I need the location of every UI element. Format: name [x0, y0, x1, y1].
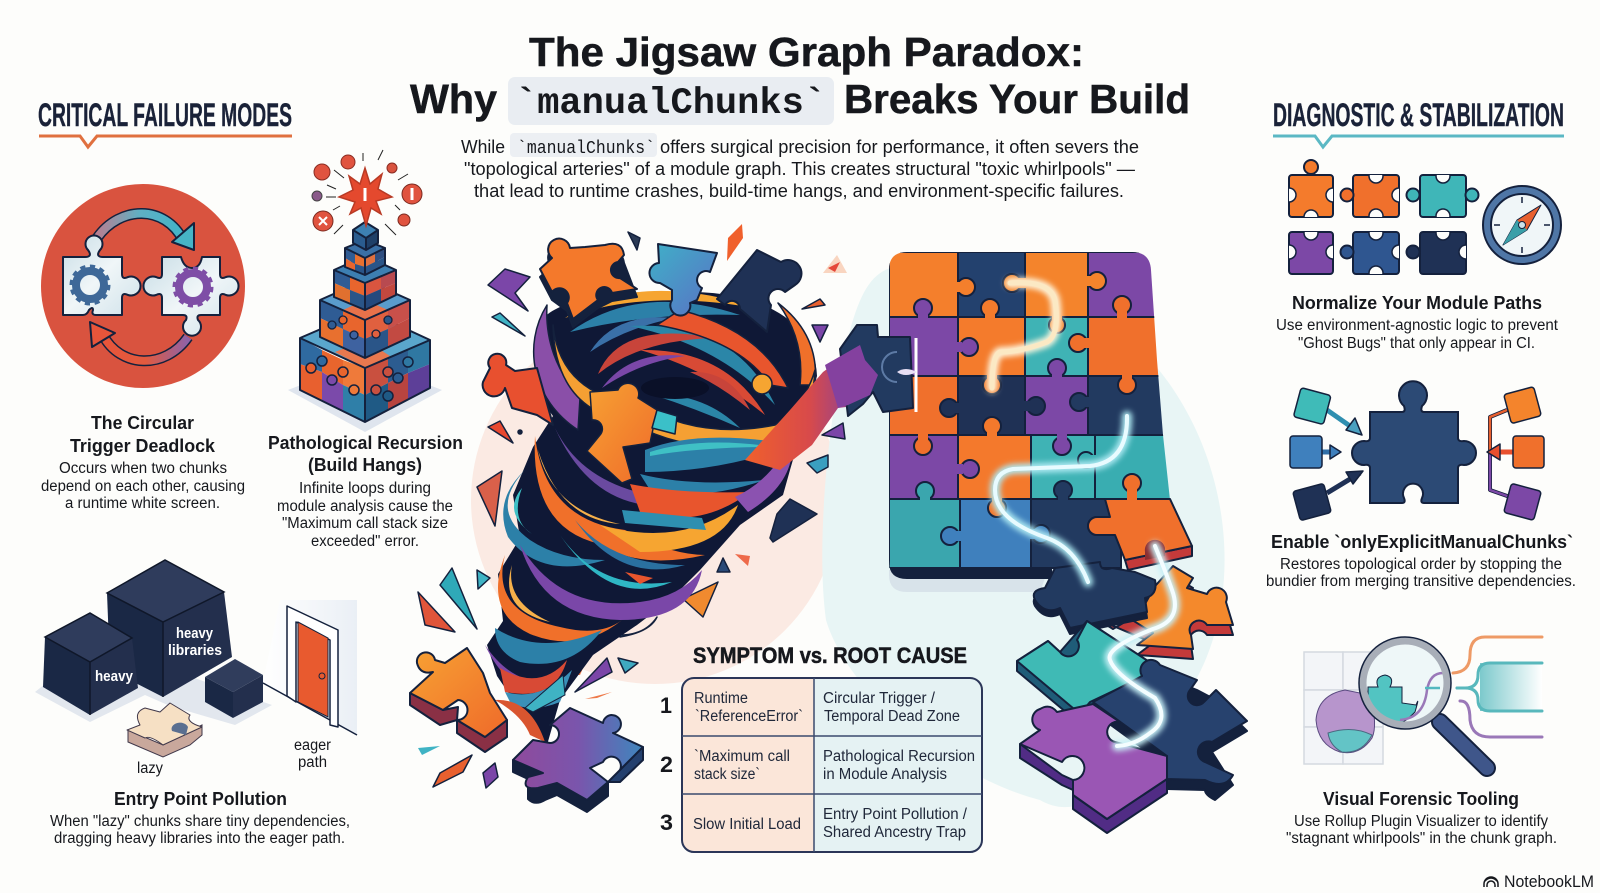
board shadow [889, 565, 1045, 592]
panel: enable onlyExplicitManualChunks [1266, 381, 1576, 590]
text: circular trigger deadlock: Occurs when two chunks [59, 460, 227, 477]
symptoms column [693, 690, 803, 833]
root causes column: Temporal Dead Zone [824, 708, 960, 725]
root causes column [823, 690, 975, 841]
section heading: critical failure modes: CRITICAL FAILURE MODES [38, 97, 292, 133]
panel: circular trigger deadlock [41, 184, 245, 512]
tornado inner eye [641, 377, 709, 399]
panel: normalize module paths [1276, 160, 1561, 352]
symptoms column: Runtime [694, 690, 748, 707]
tornado mid bands [485, 428, 795, 742]
text: enable onlyExplicitManualChunks [1266, 531, 1576, 590]
text: entry point pollution: dragging heavy libraries into the eager path. [54, 830, 345, 847]
label: heavy libraries: libraries [168, 642, 222, 659]
text: normalize module paths: "Ghost Bugs" that only appear in CI. [1298, 335, 1535, 352]
label: heavy libraries: heavy [176, 625, 214, 642]
board knobs [914, 272, 1141, 545]
board lower-right orange piece [1088, 488, 1192, 570]
section heading: critical failure modes [38, 97, 292, 147]
table numbers [660, 693, 673, 835]
text: pathological recursion: Pathological Recursion [268, 432, 463, 453]
label: heavy libraries [168, 625, 222, 659]
arm: tornado reaching to board [745, 345, 862, 470]
text: normalize module paths: Use environment-agnostic logic to prevent [1276, 317, 1559, 334]
icon: magnifier over chunk graph [1304, 637, 1542, 768]
text: visual forensic tooling: "stagnant whirlpools" in the chunk graph. [1286, 830, 1557, 847]
table numbers: 2 [660, 752, 673, 777]
root causes column: in Module Analysis [823, 766, 947, 783]
symptoms column: `Maximum call [694, 748, 790, 765]
title: Breaks Your Build [844, 76, 1190, 122]
text: enable onlyExplicitManualChunks: Enable `onlyExplicitManualChunks` [1271, 531, 1573, 552]
label: eager path: eager [294, 737, 331, 754]
intro paragraph: offers surgical precision for performance, it often severs the [660, 136, 1139, 157]
piece: orange embedded in rim [587, 374, 772, 483]
text: pathological recursion: Infinite loops during [299, 480, 431, 497]
text: visual forensic tooling: Visual Forensic Tooling [1323, 788, 1519, 809]
table heading: SYMPTOM vs. ROOT CAUSE [693, 643, 967, 668]
tornado body silhouette [487, 292, 817, 745]
text: normalize module paths: Normalize Your Module Paths [1292, 292, 1542, 313]
text: circular trigger deadlock [41, 412, 245, 512]
brand: NotebookLM: NotebookLM [1504, 872, 1594, 891]
symptoms column: stack size` [694, 766, 760, 783]
root causes column: Pathological Recursion [823, 748, 975, 765]
text: circular trigger deadlock: a runtime white screen. [65, 495, 220, 512]
intro paragraph: `manualChunks` [517, 139, 655, 159]
text: pathological recursion [268, 432, 463, 550]
icon: central puzzle piece with explicit inputs [1290, 381, 1544, 521]
tornado fragments [418, 224, 847, 788]
knob necks [918, 276, 1132, 541]
text: entry point pollution: When "lazy" chunks share tiny dependencies, [50, 813, 350, 830]
text: pathological recursion: "Maximum call stack size [282, 515, 448, 532]
text: circular trigger deadlock: The Circular [91, 412, 194, 433]
illustration: shattering tornado of puzzle pieces [410, 224, 862, 812]
panel: visual forensic tooling [1286, 637, 1557, 847]
icon: heavy boxes, lazy piece and eager door [35, 560, 357, 777]
icon: exploding puzzle tower [288, 150, 442, 432]
title [410, 29, 1190, 125]
panel: pathological recursion [268, 150, 463, 550]
text: pathological recursion: (Build Hangs) [308, 454, 422, 475]
section heading: diagnostic and stabilization [1273, 97, 1564, 147]
title: Why [410, 76, 497, 122]
board cells [889, 252, 1175, 568]
table numbers: 3 [660, 810, 673, 835]
board base [889, 555, 1052, 579]
root causes column: Shared Ancestry Trap [823, 824, 966, 841]
text: circular trigger deadlock: depend on each other, causing [41, 478, 245, 495]
title: The Jigsaw Graph Paradox: [529, 29, 1084, 75]
text: entry point pollution [50, 788, 350, 847]
table grid [682, 678, 982, 852]
symptoms column: Slow Initial Load [693, 816, 801, 833]
title: `manualChunks` [515, 83, 826, 125]
flying pieces [410, 239, 801, 812]
background blob: pink behind tornado [471, 316, 839, 684]
title code pill [508, 77, 834, 125]
label: eager path [294, 737, 331, 771]
glowing dependency paths [992, 283, 1175, 746]
icon: aligned puzzle pieces and compass [1282, 160, 1561, 280]
icon: circular deadlock [41, 184, 245, 388]
label: heavy: heavy [95, 668, 134, 685]
tornado upper swirl [565, 291, 775, 428]
text: visual forensic tooling: Use Rollup Plugin Visualizer to identify [1294, 813, 1548, 830]
text: enable onlyExplicitManualChunks: Restores topological order by stopping the [1280, 556, 1562, 573]
text: visual forensic tooling [1286, 788, 1557, 847]
symptoms column: `ReferenceError` [695, 708, 803, 725]
label: lazy: lazy [137, 760, 163, 777]
loose pieces at bottom of board [1017, 562, 1247, 833]
intro paragraph: While [461, 136, 505, 157]
text: circular trigger deadlock: Trigger Deadlock [70, 435, 216, 456]
intro paragraph [461, 133, 1139, 201]
text: entry point pollution: Entry Point Pollution [114, 788, 287, 809]
piece: navy entering the board [825, 325, 917, 416]
background blob: pale teal behind puzzle [822, 264, 1225, 807]
text: normalize module paths [1276, 292, 1559, 352]
illustration: assembled puzzle board [825, 252, 1247, 833]
tornado rim crescents [534, 303, 816, 454]
intro paragraph: that lead to runtime crashes, build-time hangs, and environment-specific failures. [474, 180, 1124, 201]
root causes column: Circular Trigger / [823, 690, 936, 707]
text: enable onlyExplicitManualChunks: bundier from merging transitive dependencies. [1266, 573, 1576, 590]
table numbers: 1 [660, 693, 672, 718]
label: eager path: path [298, 754, 327, 771]
text: pathological recursion: exceeded" error. [311, 533, 419, 550]
root causes column: Entry Point Pollution / [823, 806, 968, 823]
panel: symptom vs root cause table [660, 643, 982, 852]
panel: entry point pollution [35, 560, 357, 847]
text: pathological recursion: module analysis cause the [277, 498, 453, 515]
intro paragraph: "topological arteries" of a module graph. This creates structural "toxic whirlpools" — [464, 158, 1135, 179]
